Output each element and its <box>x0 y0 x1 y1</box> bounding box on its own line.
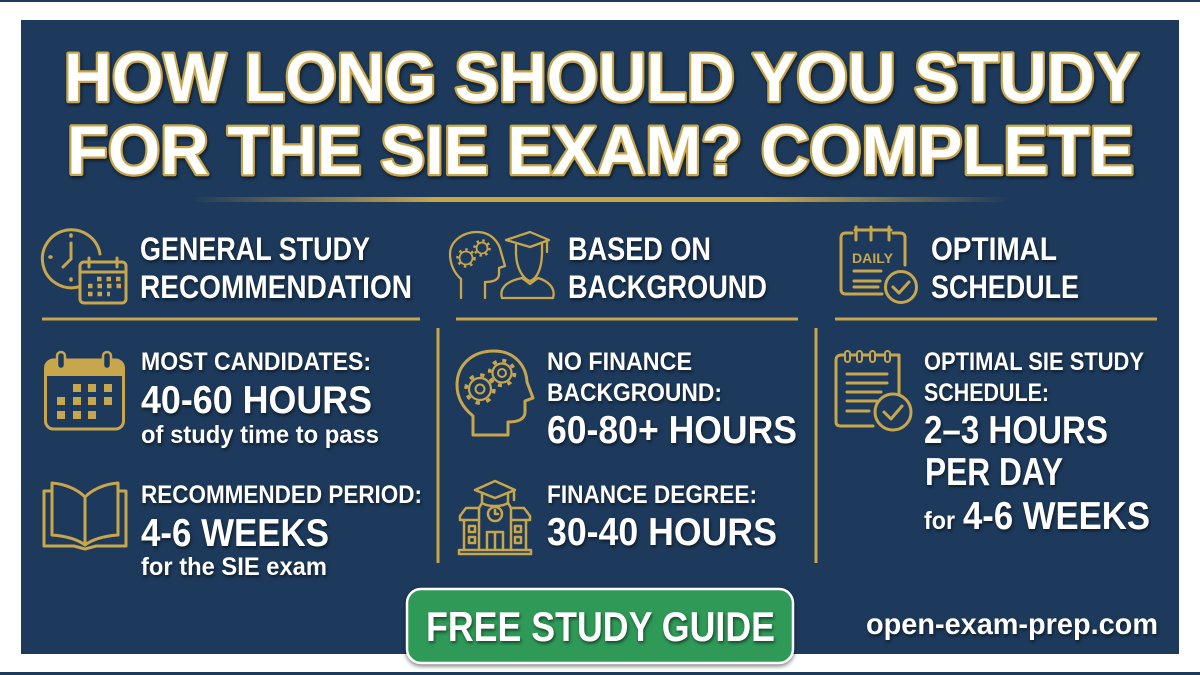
website: open-exam-prep.com <box>866 608 1158 641</box>
heading: RECOMMENDATION <box>140 269 412 305</box>
heading: BACKGROUND <box>568 269 767 305</box>
panel: general study recommendation <box>42 230 422 581</box>
text: recommended period: RECOMMENDED PERIOD: <box>141 481 422 509</box>
icon: daily planner <box>841 227 916 302</box>
text: recommended period: for the SIE exam <box>141 553 327 581</box>
panel: based on background <box>450 231 798 554</box>
text: no finance background <box>547 348 797 452</box>
text: no finance background: BACKGROUND: <box>547 379 722 407</box>
heading: OPTIMAL <box>931 231 1057 267</box>
icon: school with graduation cap <box>459 481 531 554</box>
icon: checklist <box>836 351 911 430</box>
icon: open book <box>44 483 126 549</box>
icon: clock and calendar <box>42 230 126 303</box>
text: most candidates: MOST CANDIDATES: <box>141 348 371 376</box>
heading <box>140 231 412 305</box>
text: finance degree <box>547 481 777 554</box>
text: optimal schedule details <box>924 348 1150 538</box>
heading: GENERAL STUDY <box>140 231 370 267</box>
title: FOR THE SIE EXAM? COMPLETE <box>67 112 1134 189</box>
title <box>64 39 1139 189</box>
text: recommended period: 4-6 WEEKS <box>141 512 329 555</box>
panel: optimal schedule <box>835 227 1157 538</box>
text: optimal schedule details: 2–3 HOURS <box>924 409 1108 452</box>
button: free study guide <box>407 589 793 663</box>
icon: daily planner: DAILY <box>852 250 894 266</box>
text: finance degree: FINANCE DEGREE: <box>547 481 757 509</box>
heading <box>568 231 767 305</box>
text: recommended period <box>141 481 422 581</box>
icon: head with gears <box>457 351 533 435</box>
text: optimal schedule details: OPTIMAL SIE STUDY <box>924 348 1144 376</box>
text: optimal schedule details: PER DAY <box>925 451 1063 494</box>
heading: BASED ON <box>568 231 711 267</box>
text: most candidates: 40-60 HOURS <box>141 379 372 422</box>
button: free study guide: FREE STUDY GUIDE <box>426 603 775 650</box>
text: optimal schedule details: 4-6 WEEKS <box>963 495 1150 538</box>
icon: head and graduate <box>450 232 554 298</box>
text: no finance background: 60-80+ HOURS <box>547 409 797 452</box>
text: optimal schedule details: SCHEDULE: <box>924 379 1049 407</box>
text: finance degree: 30-40 HOURS <box>547 511 777 554</box>
text: most candidates: of study time to pass <box>141 421 379 449</box>
heading: SCHEDULE <box>931 269 1079 305</box>
text: no finance background: NO FINANCE <box>547 348 692 376</box>
title: HOW LONG SHOULD YOU STUDY <box>64 39 1139 116</box>
text: optimal schedule details: for <box>924 507 955 535</box>
heading <box>931 231 1079 305</box>
icon: calendar <box>44 352 125 429</box>
text: most candidates <box>141 348 379 449</box>
